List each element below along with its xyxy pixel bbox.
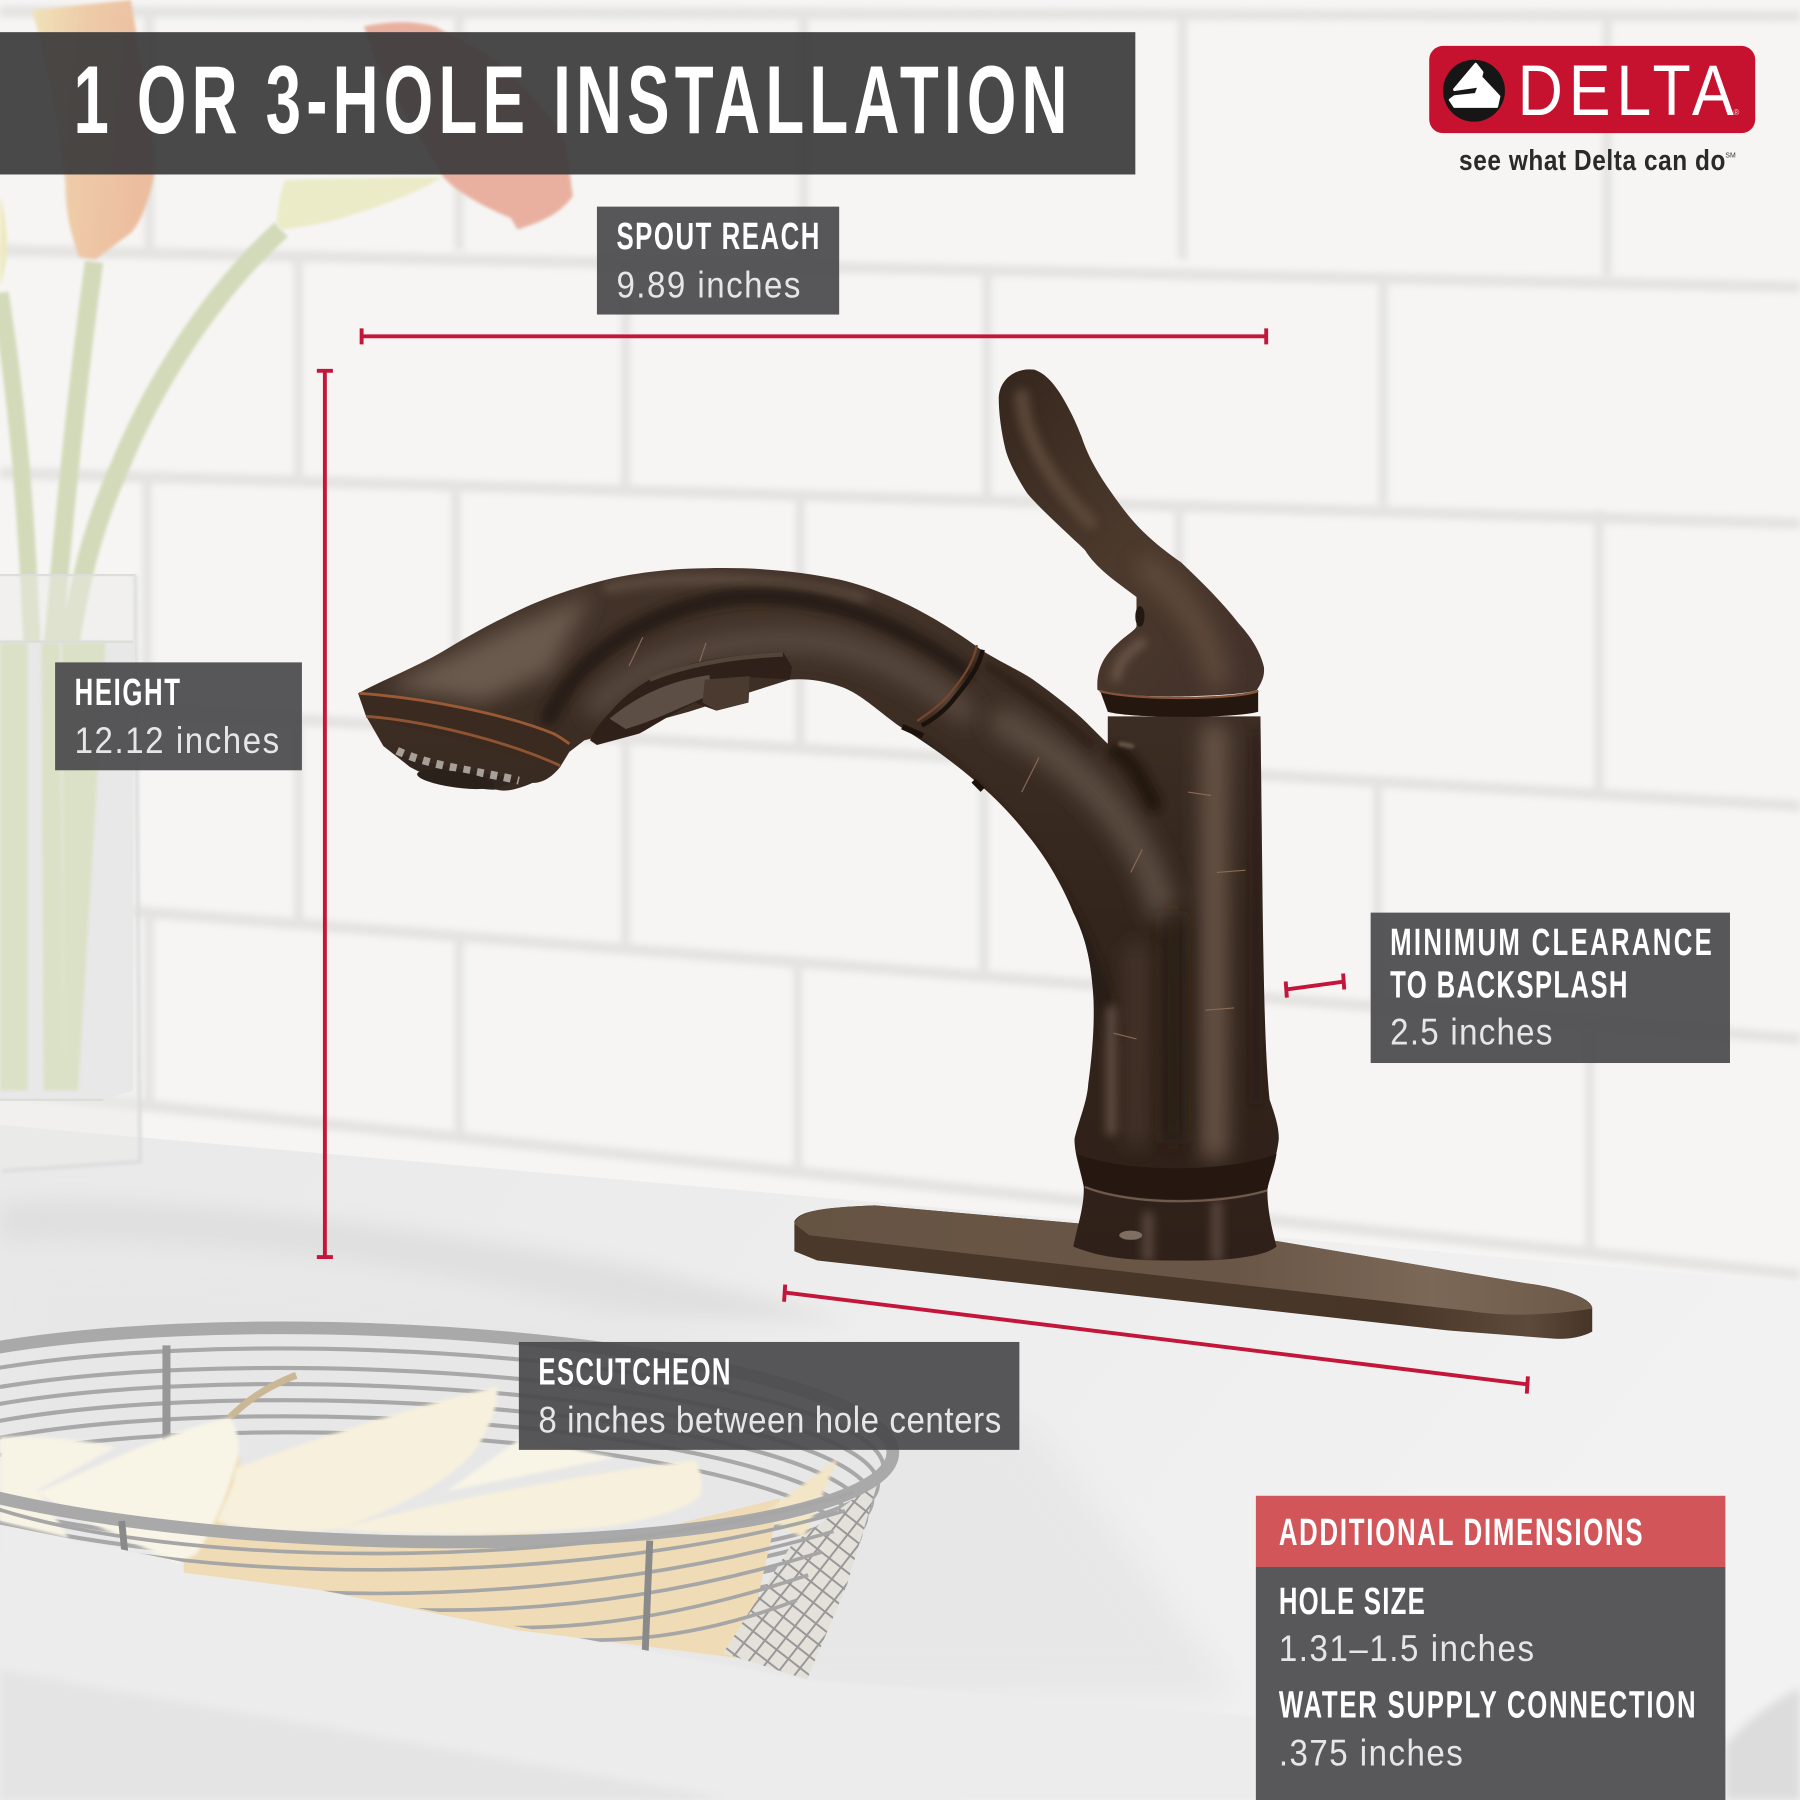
wand collar ring <box>922 650 983 726</box>
panel: spout reach <box>597 207 839 315</box>
pear slices <box>0 1387 838 1564</box>
basket rim <box>0 1311 896 1559</box>
panel: minimum clearance: 2.5 inches <box>1390 1012 1552 1053</box>
panel header <box>1256 1496 1725 1567</box>
flowers in a vase <box>0 0 573 1171</box>
basket back wires <box>0 1345 884 1588</box>
handle highlights <box>1022 396 1217 677</box>
background: tiled wall <box>0 0 1800 1297</box>
icon: Delta emblem <box>1443 60 1505 122</box>
metal highlights <box>385 579 1256 1257</box>
tan pear skins <box>184 1498 781 1659</box>
basket mesh side <box>723 1481 878 1679</box>
flower: far left yellow bloom <box>0 195 7 287</box>
escutcheon plate <box>794 1205 1592 1339</box>
wordmark: DELTA <box>1518 51 1734 131</box>
panel: height: 12.12 inches <box>75 720 279 761</box>
basket front wires <box>0 1508 846 1651</box>
flower: right bloom base <box>277 177 443 230</box>
faucet body and spout <box>358 568 1279 1261</box>
dimension: minimum clearance <box>1286 973 1344 998</box>
spray lever <box>590 652 792 745</box>
handle <box>999 369 1264 696</box>
spray face <box>396 751 519 793</box>
base mark <box>1119 1231 1142 1240</box>
tagline: see what Delta can do <box>1459 144 1725 176</box>
panel: minimum clearance: TO BACKSPLASH <box>1390 964 1627 1006</box>
panel: minimum clearance: MINIMUM CLEARANCE <box>1390 921 1712 963</box>
dimension: height <box>317 371 333 1257</box>
basket with pears <box>0 1311 896 1679</box>
panel: escutcheon: 8 inches between hole centers <box>538 1400 1001 1441</box>
handle collar <box>1100 690 1258 717</box>
wand collar copper edge <box>917 645 977 721</box>
panel: height <box>55 662 302 770</box>
counter and sink <box>0 1125 1800 1800</box>
dark base band <box>1077 1154 1277 1199</box>
panel body: .375 inches <box>1279 1733 1463 1774</box>
panel body: HOLE SIZE <box>1279 1580 1425 1622</box>
panel body: 1.31–1.5 inches <box>1279 1629 1534 1670</box>
dimension: spout reach <box>362 328 1266 344</box>
spout head bands <box>358 693 569 767</box>
panel body <box>1256 1567 1725 1800</box>
flower: right coral bloom <box>364 22 573 230</box>
base ring <box>1085 1187 1267 1201</box>
glass vase <box>0 575 140 1171</box>
pear stem <box>230 1375 296 1418</box>
registered mark: ® <box>1733 108 1739 117</box>
panel body: WATER SUPPLY CONNECTION <box>1279 1683 1696 1726</box>
scratches on finish <box>629 637 1246 1039</box>
panel: spout reach: SPOUT REACH <box>616 215 819 257</box>
panel: minimum clearance <box>1371 913 1730 1063</box>
stems <box>0 230 281 649</box>
title: 1 OR 3-HOLE INSTALLATION <box>73 47 1068 154</box>
panel: escutcheon: ESCUTCHEON <box>538 1351 730 1393</box>
side buttons <box>902 727 983 790</box>
dimension: escutcheon <box>784 1285 1528 1394</box>
dimension lines <box>317 328 1528 1394</box>
handle pin <box>1135 606 1145 627</box>
flower: left orange bloom <box>32 0 154 259</box>
panel: spout reach: 9.89 inches <box>616 265 800 306</box>
panel: escutcheon <box>519 1342 1019 1450</box>
logo: Delta <box>1429 46 1755 176</box>
panel header: ADDITIONAL DIMENSIONS <box>1279 1511 1643 1553</box>
title <box>0 32 1135 174</box>
faucet <box>358 369 1592 1339</box>
panel: height: HEIGHT <box>75 671 180 713</box>
panel: additional dimensions <box>1256 1496 1725 1800</box>
service mark: SM <box>1725 152 1736 159</box>
